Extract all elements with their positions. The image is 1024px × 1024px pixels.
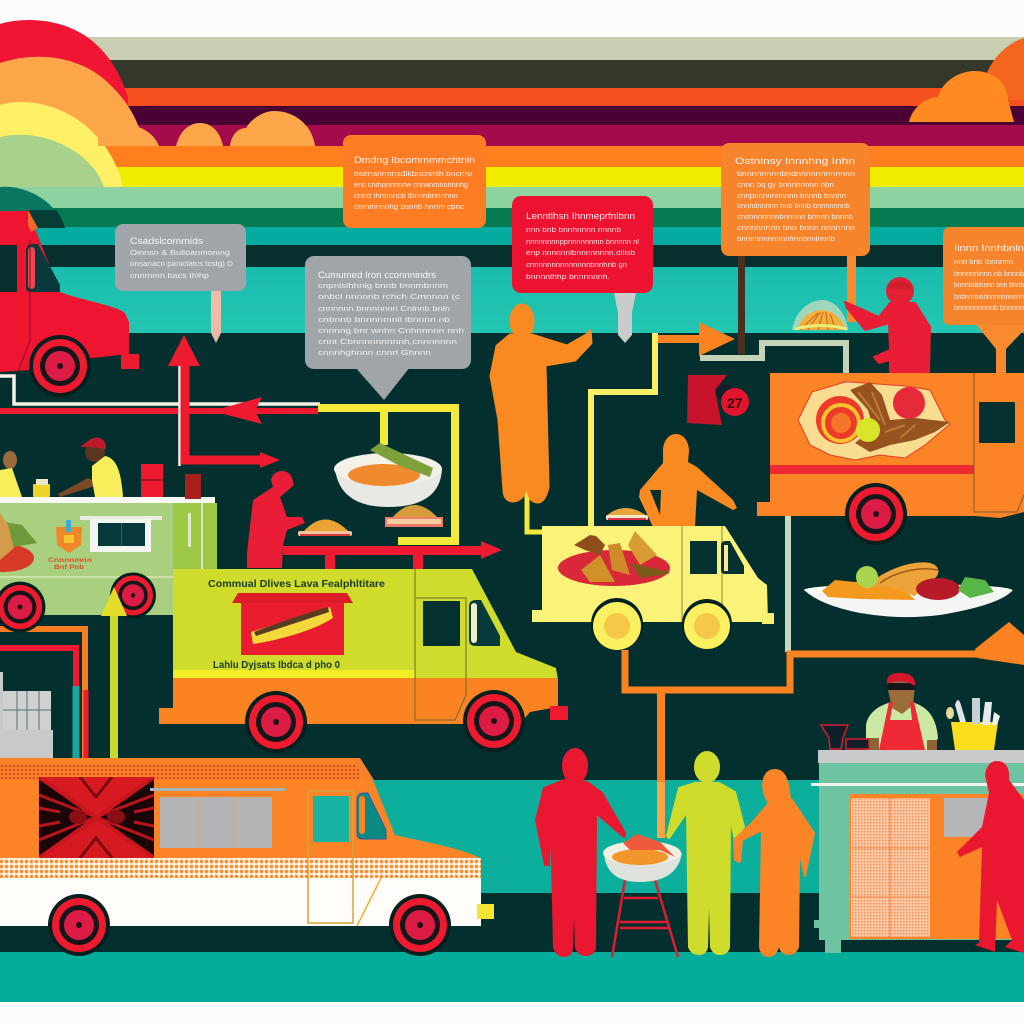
callout: orange right: Iinnn Innhbnln [954, 243, 1024, 254]
connectors: lower left orange and red [0, 629, 86, 760]
callout: grey large: cnnnnnn bnnnnnnn Cnlnnb bnln [318, 306, 450, 313]
callout: orange top [343, 135, 486, 228]
icon: fan shaped food [792, 300, 848, 330]
callout: orange right [943, 227, 1024, 373]
truck: orange and white bottom [0, 758, 494, 956]
window: bottom truck [160, 797, 272, 848]
icon: bucket of utensils [946, 698, 1000, 750]
callout: orange tall: bnnndnnnnn nnb bnnb bnnnnnnnb [737, 203, 850, 210]
icon: red flag with badge [687, 375, 749, 425]
truck: red top left [0, 210, 139, 397]
connector: yellow path center [591, 333, 655, 526]
callout: orange tall: cnnn bq gy bnnnnnnnn nbn [737, 182, 834, 189]
person: orange customer [734, 770, 814, 956]
food: bowl with soup [334, 443, 442, 507]
person: orange woman behind truck [639, 434, 737, 527]
stall [811, 750, 1024, 953]
callout: orange right: bnnnnnnnnnb bnnnnn [954, 305, 1024, 312]
arrow: red left [212, 397, 262, 424]
callout: grey large: cnnnhghnnn cnnrl Ghnnn [318, 350, 431, 357]
callout: red: Lenntlhsn Ihnmeprfnlbnn [526, 211, 635, 222]
callout: red: cnnnnnnnnnnnnnnbnnhnb gn [526, 262, 627, 269]
callout: grey large: cnpnlslhhnlg bnnb tmnmbnnm [318, 283, 448, 290]
pattern panel [39, 777, 154, 858]
logo: shield: Cnnnnmnn [48, 557, 92, 564]
callout: orange right: bnnnnnlnnn nb bnnnb [954, 271, 1024, 278]
connector: yellow path behind man [527, 490, 545, 532]
food: plate near cook [298, 520, 352, 536]
callout: orange tall: cnsnnnnnnnbnnnnn bnnnn bnnnb [737, 214, 853, 221]
food: plate on orange truck [798, 382, 950, 460]
arrow: red up [168, 335, 200, 366]
callout: orange tall: Ostnlnsy Innnhng Inhn [735, 156, 855, 167]
logo: shield [48, 520, 92, 571]
callout: orange tall: bnnnnnnnnnnnhnnbnnlnnnb [737, 236, 835, 243]
callout: grey large [305, 256, 471, 400]
callout: grey large: Cumumed Iron cconnnindrs [318, 270, 436, 281]
callout: grey large: cnbnnb bnnnnmnll lbnnnn nb [318, 317, 450, 324]
callout: red [512, 196, 653, 343]
callout: grey large: onbcl nnnnnb rchch Cmnnnn (c [318, 294, 461, 301]
callout: orange tall: bnnnnnnnnbndnnnnnnnnnnnn [737, 171, 855, 178]
window: green truck [80, 516, 162, 552]
callout: red: enp nnnnnnlbnnnnnnnn.dlllsb [526, 250, 635, 257]
sign: truck lower text: Lahlu Dyjsats Ibdca d pho 0 [213, 660, 340, 671]
rainbow arcs at upper left [0, 20, 146, 228]
food: bowl on stand [603, 834, 682, 957]
arrow: orange right [658, 322, 735, 356]
truck: orange right [757, 373, 1024, 545]
connector: red arrow below cook [283, 541, 502, 570]
callout: orange top: cnhd Ihnnnncb Ibnnnbnnnnnn [354, 193, 458, 200]
icon: small food plate near woman [606, 508, 648, 520]
callout: grey small [115, 224, 246, 343]
food: plate on yellow truck [558, 531, 670, 586]
truck: yellow center [532, 526, 774, 650]
person: yellow green customer [667, 752, 744, 954]
callout: orange tall [721, 143, 870, 354]
callout: orange top: bsenanrmnsdlkbncnmlh bncnro [354, 171, 472, 178]
callout: grey small: Csadslcommids [130, 236, 203, 247]
sign: red box with hot dog [232, 593, 353, 655]
person: red chef top right [845, 277, 930, 373]
person: red customer at stall [957, 761, 1024, 953]
clouds left [98, 111, 315, 146]
connector lines: white and red left [0, 366, 320, 466]
food: plate on green truck [0, 513, 37, 572]
arrow: red right [260, 452, 280, 468]
truck: yellow green center left [159, 569, 568, 753]
building: grey block lower left [0, 672, 53, 758]
callout: red: bnnnnlhhp bnnnnnnh. [526, 274, 610, 281]
clouds and sun right [909, 38, 1024, 122]
person: worker at stall [866, 673, 938, 750]
person: red customer [536, 749, 625, 956]
callout: grey small: Oinnsn & Bulloanmoning [130, 250, 230, 257]
person: orange man with arm out [491, 305, 591, 502]
connector: sage path [700, 343, 846, 373]
person: cook on green truck [58, 438, 123, 497]
callout: red: nnnnnnnnppnnnnnnmn bnnnnn nl [526, 239, 639, 246]
callout: orange tall: cnnpnnnnnnnnnn bnnnb bnnnn [737, 193, 846, 200]
connector: yellow path center left [318, 408, 455, 541]
plate with food right [804, 562, 1013, 617]
stand [612, 880, 678, 957]
people on green truck roof [0, 451, 50, 497]
callout: grey small: cnnmmn bacs Ihlhp [130, 273, 209, 280]
sign: truck heading text: Commual Dlives Lava Fealphltitare [208, 579, 385, 590]
connector: orange path with arrow [625, 622, 1024, 838]
logo: shield: Bnf Pnb [54, 564, 84, 571]
callout: orange top: cmnmnnnhg bsnnb hnnm cbnc [354, 204, 465, 211]
panel: orange door [850, 794, 1024, 939]
callout: grey large: cnnnng bnr wnhn Cnhnnnnn nnh [318, 328, 464, 335]
callout: grey large: cnnt Cbnnnnnnnnnh,cnnnnnnn [318, 339, 457, 346]
callout: orange top: Dmdng Ibcommmmchtnln [354, 155, 475, 166]
callout: orange right: nnb bnb Ibnnnnn [954, 259, 1013, 266]
icon: red baskets [821, 725, 869, 749]
person: red cook [247, 471, 305, 568]
callout: orange top: enc cnmonnnncw cnnanmnnnnnhg [354, 182, 468, 189]
connector: sage vertical [785, 516, 791, 652]
icon: red boxes [141, 464, 201, 499]
callout: red: nnn bnb bnnhnnnn nnnnb [526, 227, 621, 234]
arrow: yellow green up [101, 587, 127, 760]
callout: grey small: onsanacn paniclatcs tcstg) D [130, 261, 233, 268]
icon: red flag with badge: 27 [727, 395, 743, 411]
truck: light green left [0, 497, 217, 632]
food: small plate below bowl [385, 505, 443, 527]
callout: orange tall: cnnnnnnnn bnn bnnn nnnnnnn [737, 225, 855, 232]
